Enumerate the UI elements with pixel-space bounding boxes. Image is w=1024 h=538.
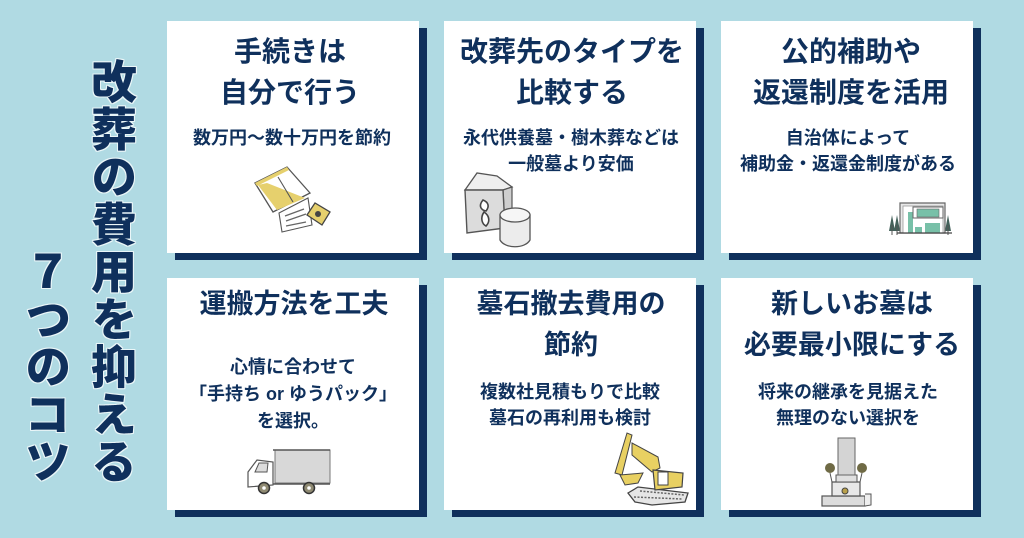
text block: を選択。 bbox=[257, 411, 329, 431]
heading bbox=[476, 289, 666, 360]
panel: transport methods bbox=[167, 278, 419, 510]
icon: truck bbox=[247, 449, 330, 494]
text block: 自治体によって bbox=[786, 128, 910, 148]
icon: excavator bbox=[614, 432, 689, 506]
text block: 一般墓より安価 bbox=[508, 154, 634, 174]
text block: 「手持ち or ゆうパック」 bbox=[189, 384, 397, 404]
title: main vertical line: 改葬の費用を抑える bbox=[85, 58, 137, 486]
text block bbox=[480, 382, 660, 428]
heading bbox=[460, 36, 684, 108]
text block: 無理のない選択を bbox=[776, 408, 920, 428]
panel: gravestone removal cost bbox=[444, 278, 696, 510]
text block: 補助金・返還金制度がある bbox=[740, 154, 956, 174]
panel: public subsidies bbox=[721, 21, 973, 253]
panel: keep new grave minimal bbox=[721, 278, 973, 510]
heading: 返還制度を活用 bbox=[753, 76, 949, 108]
text block bbox=[740, 128, 956, 174]
title: second vertical line: ７つのコツ bbox=[19, 248, 71, 486]
icon: municipal building bbox=[889, 202, 952, 235]
heading: 公的補助や bbox=[781, 36, 921, 67]
text block: 将来の継承を見据えた bbox=[758, 382, 938, 402]
text block bbox=[463, 128, 679, 174]
heading: 節約 bbox=[544, 330, 598, 360]
heading: 改葬先のタイプを bbox=[460, 36, 684, 67]
panel: compare reburial types bbox=[444, 21, 696, 253]
heading: 自分で行う bbox=[220, 76, 360, 108]
text block: 墓石の再利用も検討 bbox=[489, 408, 651, 428]
heading: 運搬方法を工夫 bbox=[200, 289, 388, 319]
heading bbox=[744, 289, 960, 360]
icon: urn and container bbox=[464, 172, 531, 248]
text block: 数万円～数十万円を節約 bbox=[193, 128, 391, 148]
heading bbox=[220, 36, 360, 108]
heading: 比較する bbox=[516, 76, 628, 108]
heading: 必要最小限にする bbox=[744, 330, 960, 360]
icon: gravestone bbox=[821, 438, 872, 507]
heading: 新しいお墓は bbox=[771, 289, 933, 319]
text block: 永代供養墓・樹木葬などは bbox=[463, 128, 679, 148]
icon: envelope and documents bbox=[254, 166, 331, 233]
text block: 複数社見積もりで比較 bbox=[480, 382, 660, 402]
panel: do procedures yourself bbox=[167, 21, 419, 253]
text block bbox=[189, 357, 397, 431]
heading bbox=[753, 36, 949, 108]
text block: 心情に合わせて bbox=[230, 357, 356, 377]
text block bbox=[758, 382, 938, 428]
heading: 墓石撤去費用の bbox=[476, 289, 666, 319]
heading: 手続きは bbox=[234, 36, 346, 67]
